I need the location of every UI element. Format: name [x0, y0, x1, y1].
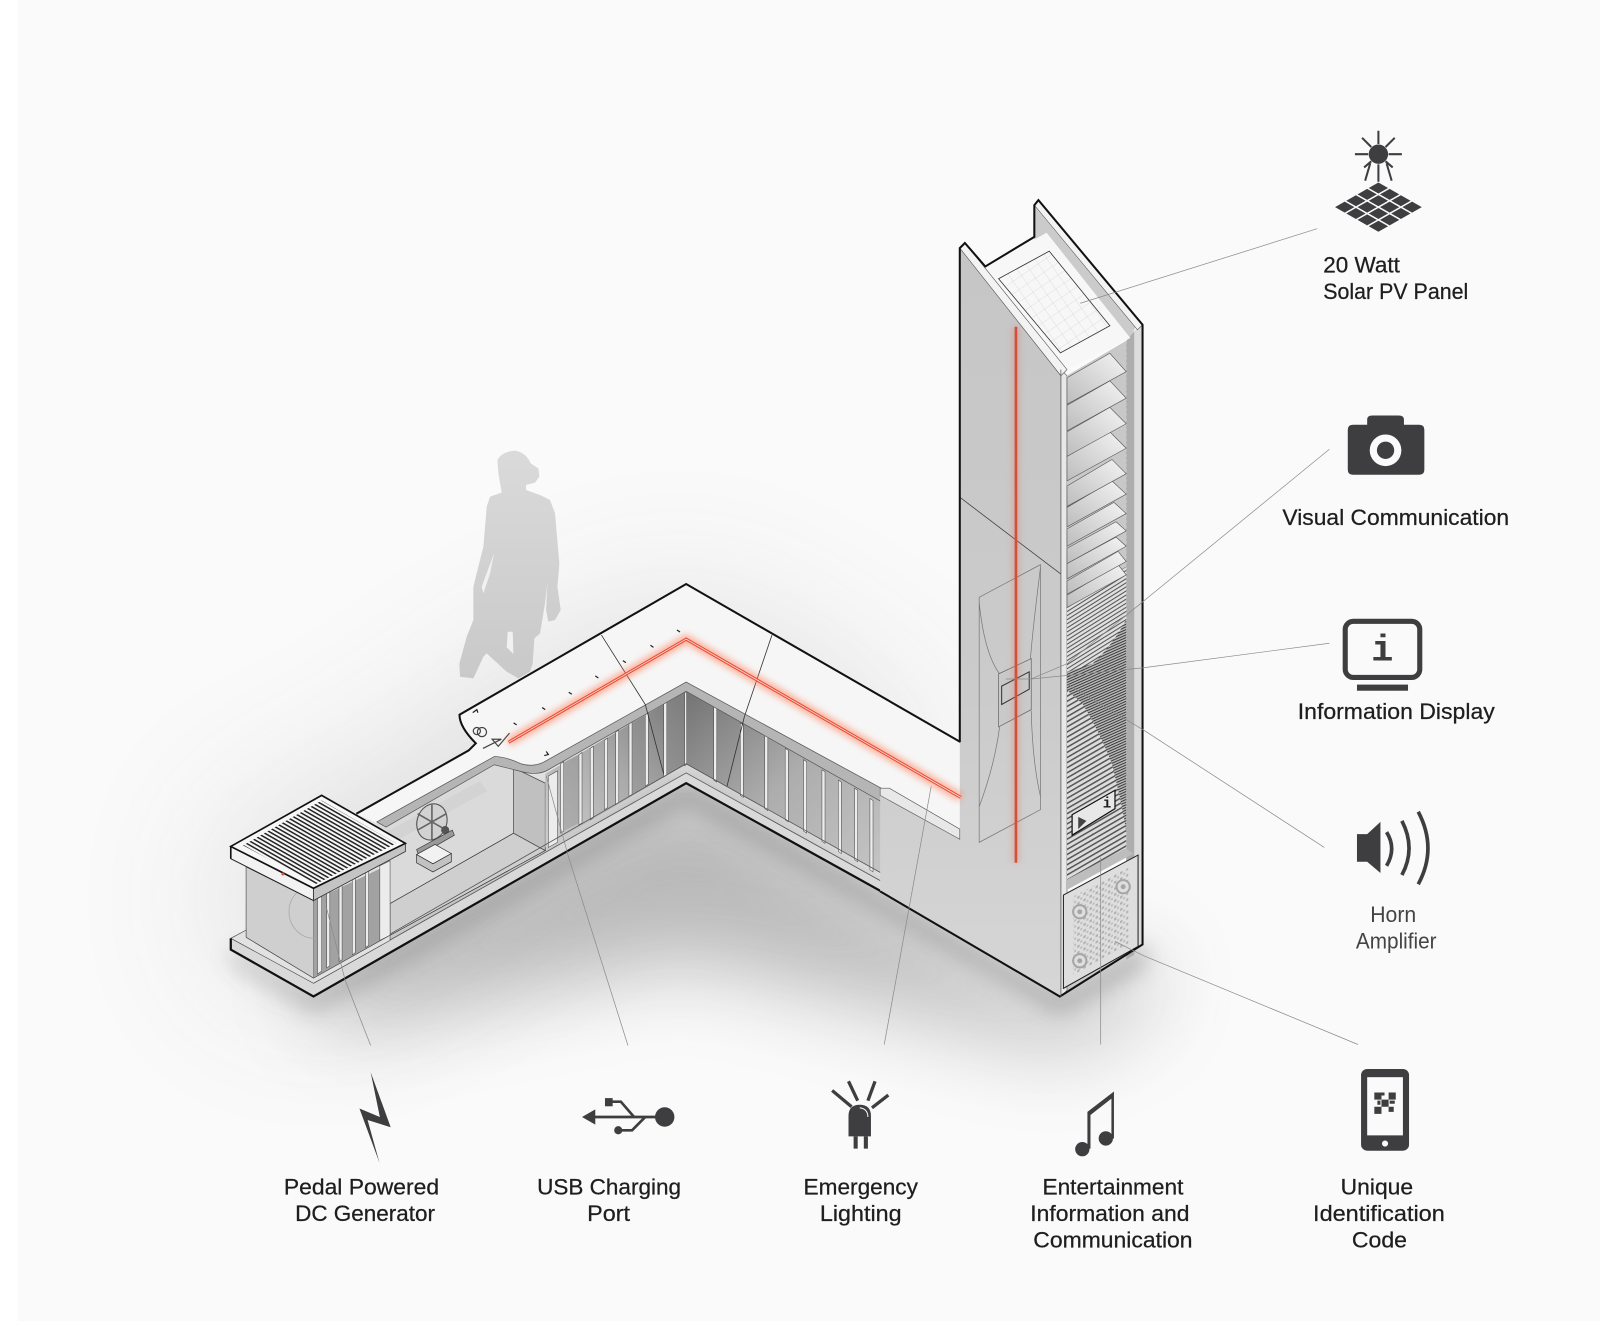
right fins	[714, 707, 873, 872]
person silhouette	[459, 451, 561, 678]
box side	[246, 867, 313, 978]
bench black outline	[356, 584, 961, 814]
label: information display: Information Display	[1298, 699, 1496, 724]
left fin wedges	[564, 692, 684, 831]
horn curved area	[1067, 620, 1126, 833]
tower wall	[880, 248, 1061, 997]
louver recess	[1067, 341, 1126, 886]
label: unique identification code: Unique	[1341, 1175, 1413, 1200]
bay column	[514, 768, 545, 851]
icon: monitor	[1345, 621, 1420, 691]
lightning mark and bell	[473, 727, 510, 748]
base plate edges	[246, 764, 881, 983]
leader lines	[327, 229, 1358, 1046]
icon: sun and solar panel	[1335, 131, 1422, 232]
flanges	[960, 243, 1067, 376]
plate top	[231, 795, 405, 888]
callout: entertainment: Information and	[1030, 1201, 1190, 1226]
base top	[231, 930, 390, 983]
tower top surface	[985, 233, 1130, 371]
label: horn amplifier: Horn	[1370, 902, 1416, 927]
callout: emergency lighting	[804, 1081, 919, 1226]
callout: unique identification code	[1313, 1069, 1445, 1253]
icon: lightning bolt	[359, 1072, 391, 1163]
icon: speaker	[1357, 812, 1428, 884]
callout: information display	[1298, 621, 1496, 724]
icon: USB	[582, 1098, 674, 1134]
icon: smartphone with QR	[1361, 1069, 1409, 1151]
callout: emergency lighting: Lighting	[820, 1201, 902, 1226]
callout: USB charging port: Port	[587, 1201, 631, 1226]
bench top surface	[356, 584, 961, 832]
bay floor	[390, 833, 545, 935]
label: pedal generator: Pedal Powered	[284, 1175, 439, 1200]
back web	[1034, 206, 1135, 338]
flywheel and generator	[386, 781, 487, 872]
icon: monitor: i	[1371, 631, 1393, 673]
QR panel	[1063, 855, 1138, 988]
callout: pedal generator	[284, 1072, 439, 1226]
bench seams	[601, 635, 772, 786]
bench ticks	[473, 630, 680, 756]
callout: horn amplifier: Amplifier	[1356, 929, 1437, 954]
right grey strips	[1126, 331, 1134, 960]
callout: entertainment: Communication	[1033, 1228, 1193, 1253]
soft floor shadow	[231, 602, 1154, 1052]
outer base edge	[231, 783, 881, 997]
icon: music notes	[1075, 1091, 1114, 1156]
label: solar panel: 20 Watt	[1323, 253, 1401, 278]
label: entertainment: Entertainment	[1042, 1175, 1184, 1200]
pedal fins	[313, 864, 390, 978]
kiosk: tower	[880, 200, 1143, 997]
left fins	[548, 692, 688, 847]
callout: USB charging port	[537, 1098, 681, 1226]
icon: camera	[1348, 416, 1424, 475]
callout: solar panel	[1323, 131, 1468, 304]
power line: red glow	[508, 327, 1016, 863]
solar panel	[999, 251, 1110, 353]
right fin bay	[686, 691, 881, 873]
left fin bay	[545, 691, 686, 847]
callout: unique identification code: Identification	[1313, 1201, 1445, 1226]
callout: unique identification code: Code	[1352, 1228, 1407, 1253]
plate sides	[231, 846, 313, 901]
callout: entertainment	[1030, 1091, 1193, 1253]
tower black outline	[880, 200, 1143, 997]
label: USB charging: USB Charging	[537, 1175, 681, 1200]
bench grey edge band	[377, 682, 881, 827]
kiosk: pedal unit	[231, 783, 881, 997]
callout: visual communication	[1282, 416, 1509, 530]
label: emergency lighting: Emergency	[804, 1175, 919, 1200]
label: visual communication: Visual Communication	[1282, 505, 1509, 530]
small raised strip	[880, 788, 960, 839]
callout: pedal generator: DC Generator	[295, 1201, 436, 1226]
callout: solar panel: Solar PV Panel	[1323, 279, 1468, 304]
bench outer silhouette base	[231, 773, 881, 997]
bay wall with flywheel	[377, 764, 514, 904]
info plate: i	[1103, 797, 1111, 813]
slats	[1067, 353, 1126, 608]
info plate	[1072, 790, 1115, 835]
ledge	[1066, 848, 1133, 890]
callout: horn amplifier	[1356, 812, 1437, 954]
plate red dot	[281, 872, 284, 876]
front strip	[1061, 370, 1067, 997]
icon: LED	[832, 1081, 888, 1149]
wall seam	[960, 497, 1062, 575]
plate grate	[243, 800, 396, 884]
speaker panel outline	[979, 565, 1040, 842]
kiosk: horizontal bench	[231, 584, 961, 997]
